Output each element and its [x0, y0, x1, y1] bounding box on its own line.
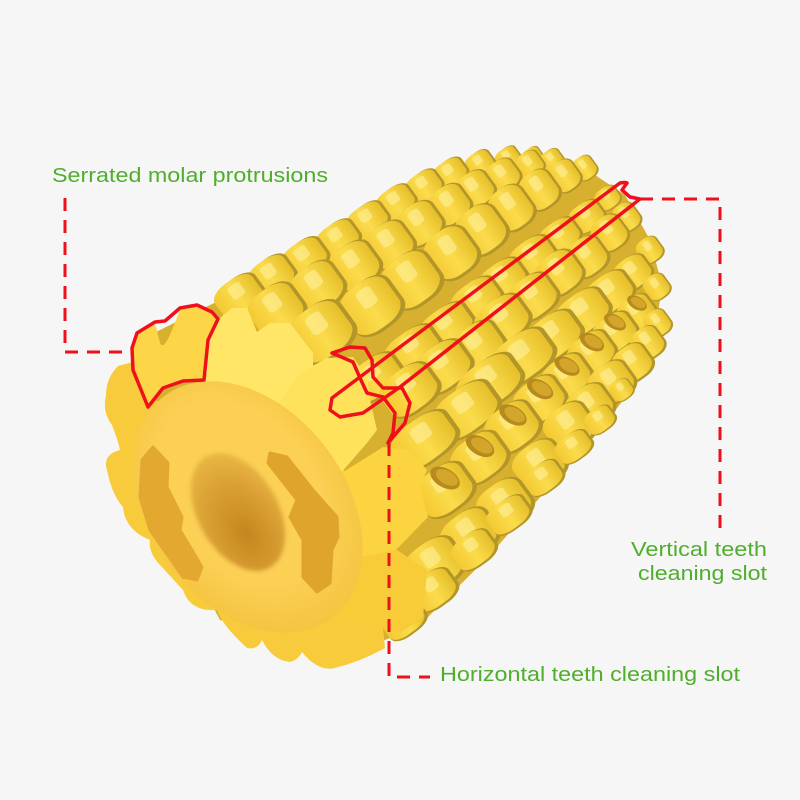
red outline: molar protrusion [132, 305, 218, 407]
red outline: vertical slot [330, 182, 640, 417]
corn toy [86, 142, 676, 677]
front petal: right lower [340, 550, 427, 633]
kernel row f [385, 232, 668, 478]
label: vertical teeth cleaning slot: Vertical teeth [631, 539, 767, 561]
kernel row e [374, 198, 646, 425]
label: vertical teeth cleaning slot: cleaning slot [638, 563, 768, 585]
red outline: horizontal slot [332, 347, 410, 443]
label: vertical teeth cleaning slot [631, 539, 768, 585]
center hole [171, 437, 305, 587]
kernel row c [281, 151, 602, 373]
leader line: horizontal slot [389, 443, 430, 677]
kernel row g with holes [408, 269, 675, 526]
leader line: vertical slot [640, 199, 720, 530]
corn body base [130, 155, 662, 655]
scalloped front flower [105, 362, 385, 669]
left side hole [140, 447, 202, 580]
kernel row h [398, 305, 676, 602]
front petal: molar [132, 305, 218, 407]
front petal: slot petal [278, 357, 377, 474]
kernel row a [209, 142, 545, 327]
leader line: serrated molar [65, 198, 132, 352]
kernel row d: slot row [341, 182, 625, 411]
right side hole [268, 453, 338, 592]
front face ring [86, 337, 410, 677]
label: serrated molar protrusions: Serrated molar protrusions [52, 165, 328, 187]
kernel row i [377, 375, 638, 646]
front petal: right upper [340, 447, 428, 557]
front petal: large heart [205, 308, 313, 404]
kernel row b [242, 145, 568, 346]
label: horizontal teeth cleaning slot: Horizontal teeth cleaning slot [440, 664, 741, 686]
